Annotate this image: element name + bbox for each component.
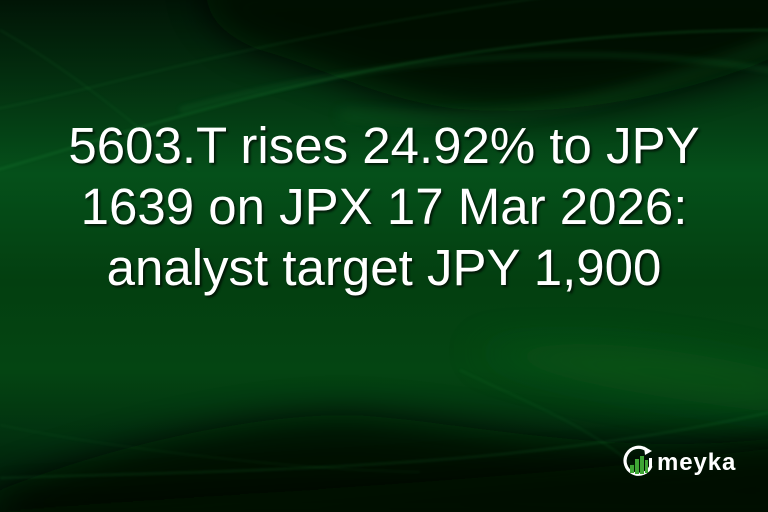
wordmark: meyka [657,449,736,476]
title: analyst target JPY 1,900 [107,239,661,296]
title [68,117,700,298]
title: 1639 on JPX 17 Mar 2026: [81,178,687,235]
title: 5603.T rises 24.92% to JPY [68,117,700,174]
logo: meyka [623,446,736,476]
icon: circular arrow with bars [625,446,652,474]
